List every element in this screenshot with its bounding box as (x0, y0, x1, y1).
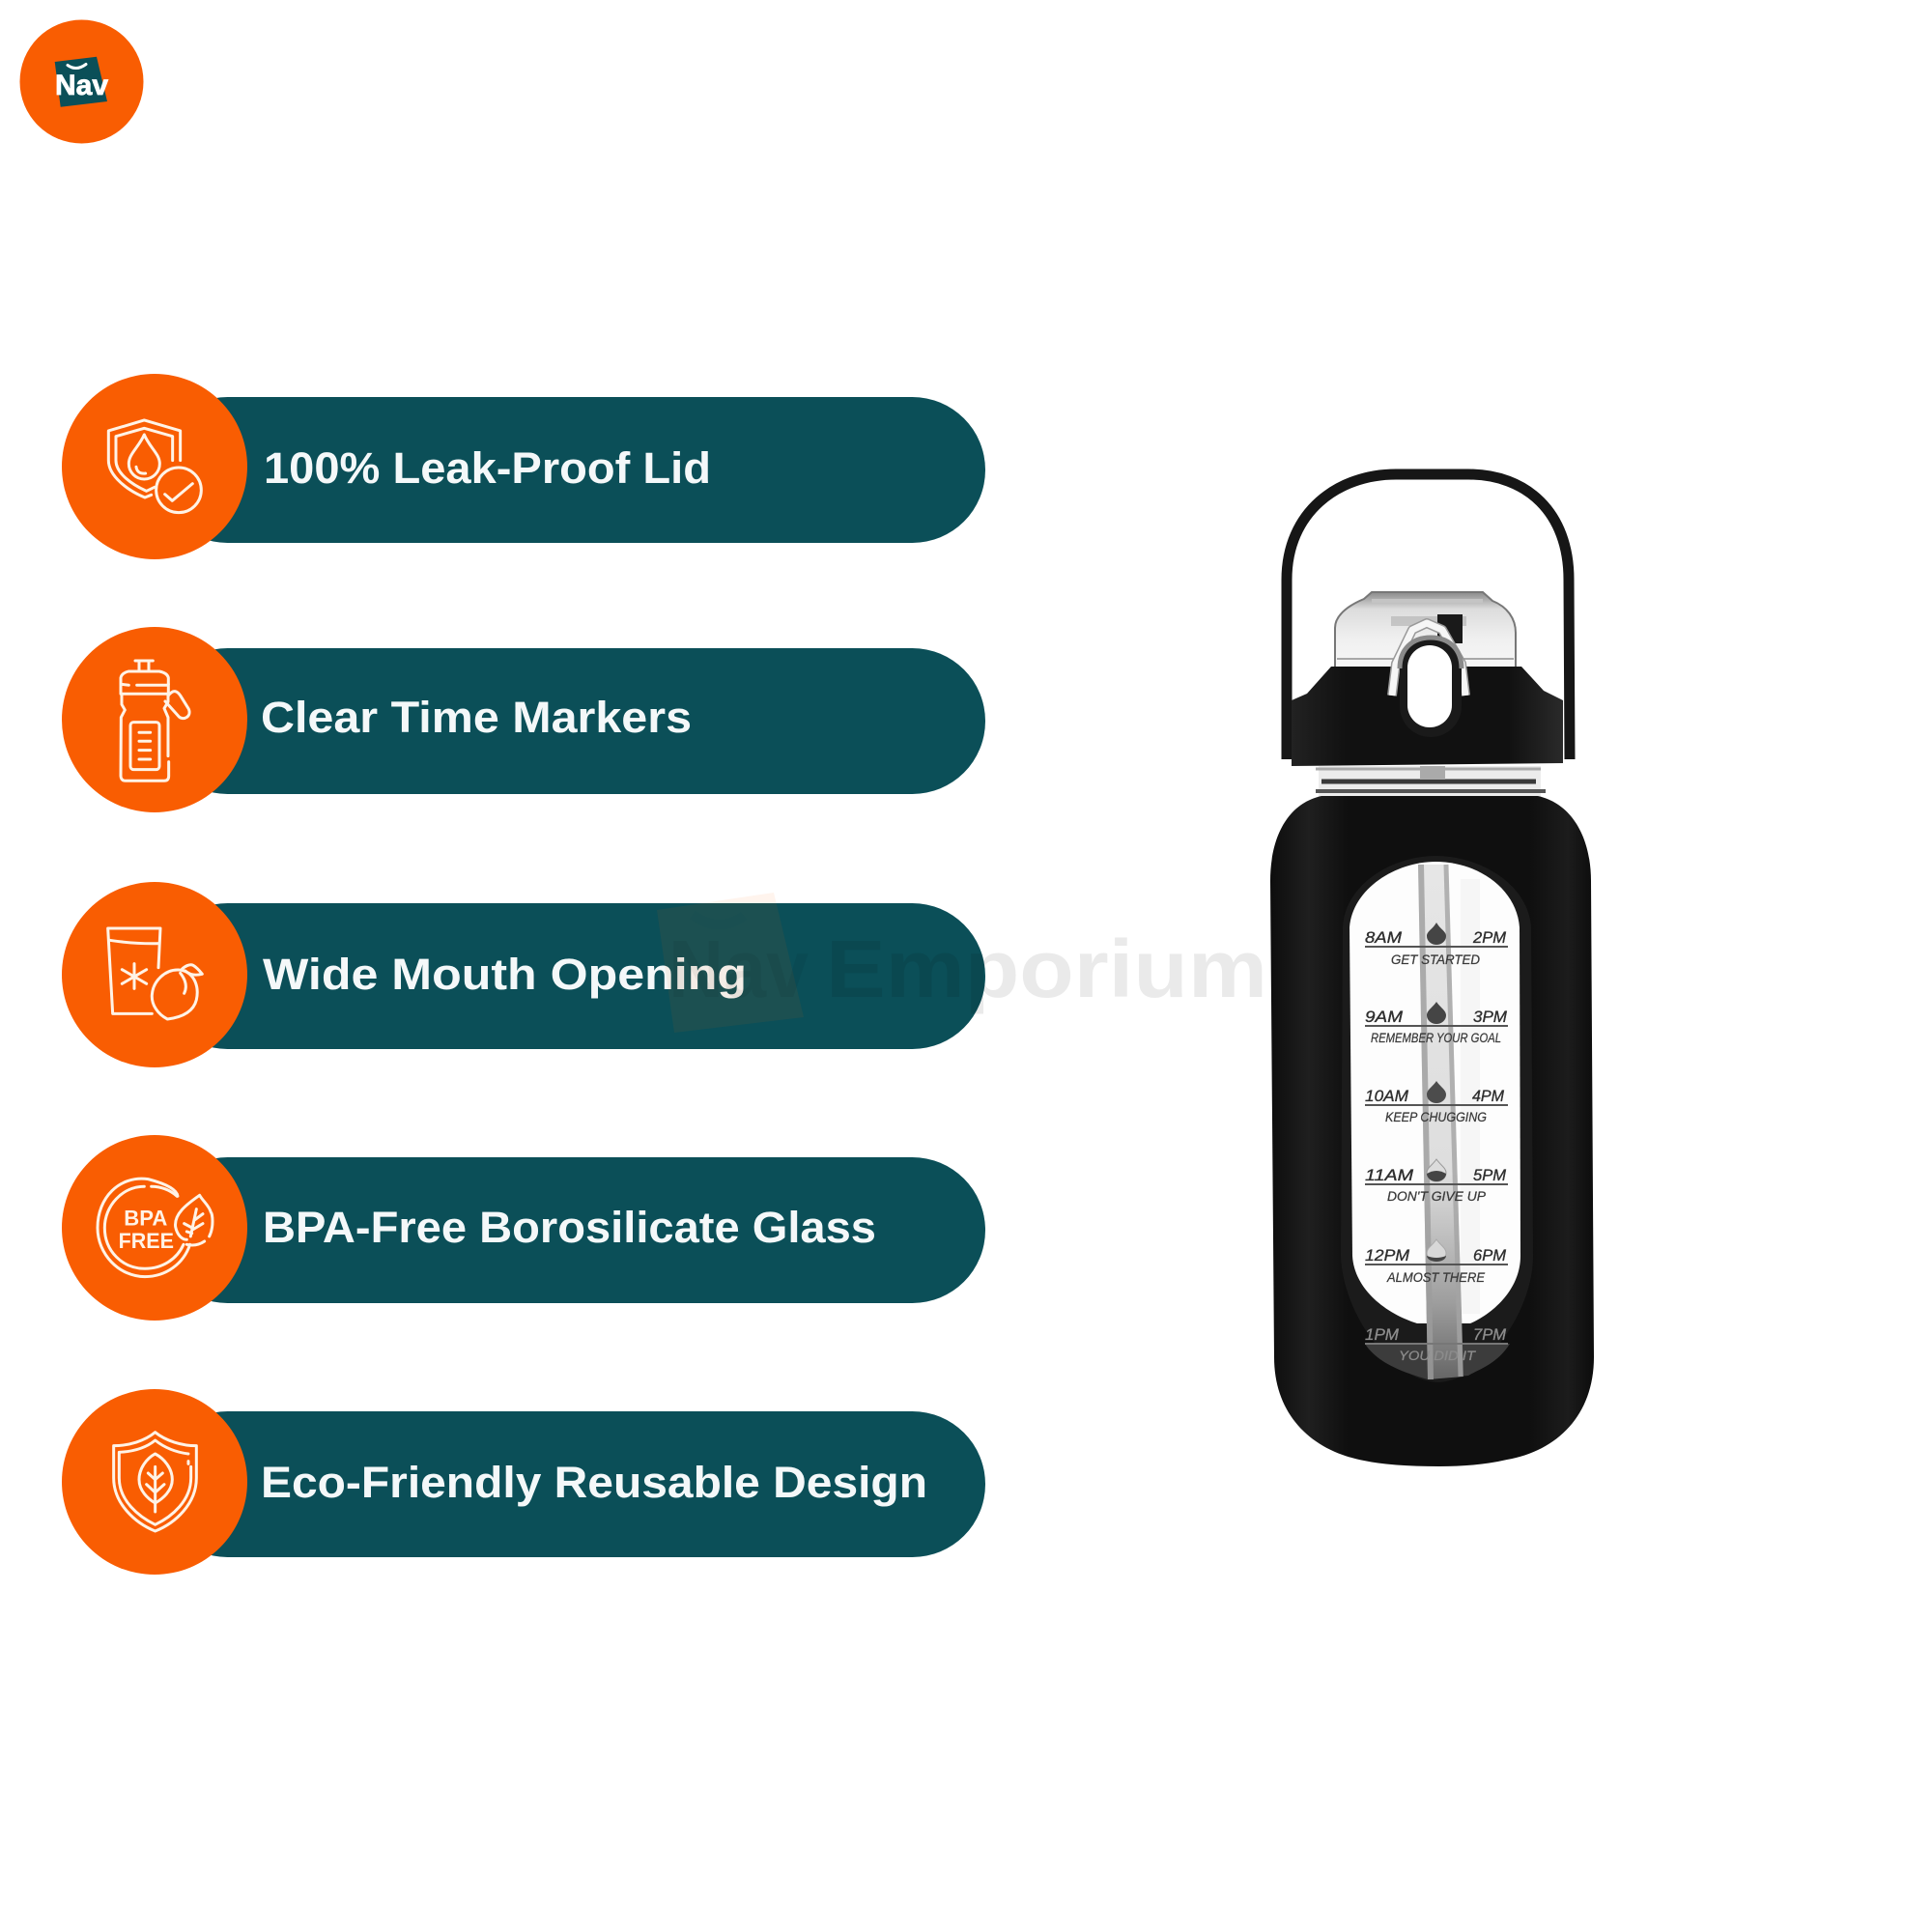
logo badge (19, 19, 143, 143)
clear lid dome (1335, 592, 1516, 668)
time markings: 3PM (1473, 1008, 1508, 1026)
straw (1418, 865, 1463, 1379)
window surround (1341, 856, 1533, 1382)
time markings: 11AM (1365, 1166, 1414, 1184)
time markings: 8AM (1365, 928, 1403, 947)
time markings: REMEMBER YOUR GOAL (1371, 1031, 1501, 1045)
feature row: time markers (62, 627, 985, 812)
icon: sports bottle (121, 661, 189, 781)
feature row: wide mouth (62, 882, 985, 1067)
reflection strip (1461, 879, 1480, 1314)
watermark: Emporium (826, 923, 1267, 1014)
icon: BPA free leaf badge (98, 1179, 213, 1277)
feature row: leak-proof lid (62, 374, 985, 559)
icon: BPA free leaf badge: FREE (119, 1229, 174, 1253)
feature row: BPA free (62, 1135, 985, 1321)
time markings: KEEP CHUGGING (1385, 1110, 1487, 1124)
time markings: 4PM (1472, 1087, 1505, 1105)
black collar (1292, 667, 1563, 766)
window (1350, 862, 1520, 1323)
logo badge: Nav (55, 70, 108, 101)
time markings: 12PM (1365, 1246, 1410, 1264)
label: 100% Leak-Proof Lid (264, 443, 711, 493)
time markings: 5PM (1473, 1166, 1507, 1184)
icon: glass and peach (108, 928, 202, 1019)
silicone sleeve (1270, 796, 1594, 1466)
glass lower band (1365, 1344, 1510, 1379)
product photo: water bottle (1270, 474, 1594, 1466)
icon: shield with drop and check (108, 420, 201, 513)
time markings (1365, 923, 1508, 1363)
time markings: YOU DID IT (1399, 1349, 1477, 1363)
time markings: 10AM (1365, 1087, 1409, 1105)
glass neck (1316, 766, 1546, 801)
icon: shield with leaf (114, 1433, 196, 1531)
time markings: 6PM (1473, 1246, 1507, 1264)
label: Eco-Friendly Reusable Design (261, 1458, 927, 1507)
label: BPA-Free Borosilicate Glass (263, 1203, 876, 1252)
time markings: ALMOST THERE (1386, 1270, 1486, 1285)
icon: BPA free leaf badge: BPA (124, 1206, 167, 1230)
label: Clear Time Markers (261, 693, 692, 742)
time markings: 2PM (1472, 928, 1507, 947)
flip latch (1392, 623, 1465, 737)
watermark: Nav (668, 923, 809, 1014)
bottle handle (1287, 474, 1570, 759)
feature row: eco-friendly (62, 1389, 985, 1575)
time markings: 7PM (1473, 1325, 1507, 1344)
time markings: 1PM (1365, 1325, 1400, 1344)
time markings: GET STARTED (1391, 952, 1480, 967)
watermark (657, 893, 1267, 1033)
time markings: DON'T GIVE UP (1387, 1189, 1486, 1204)
time markings: 9AM (1365, 1008, 1404, 1026)
label: Wide Mouth Opening (263, 950, 747, 999)
